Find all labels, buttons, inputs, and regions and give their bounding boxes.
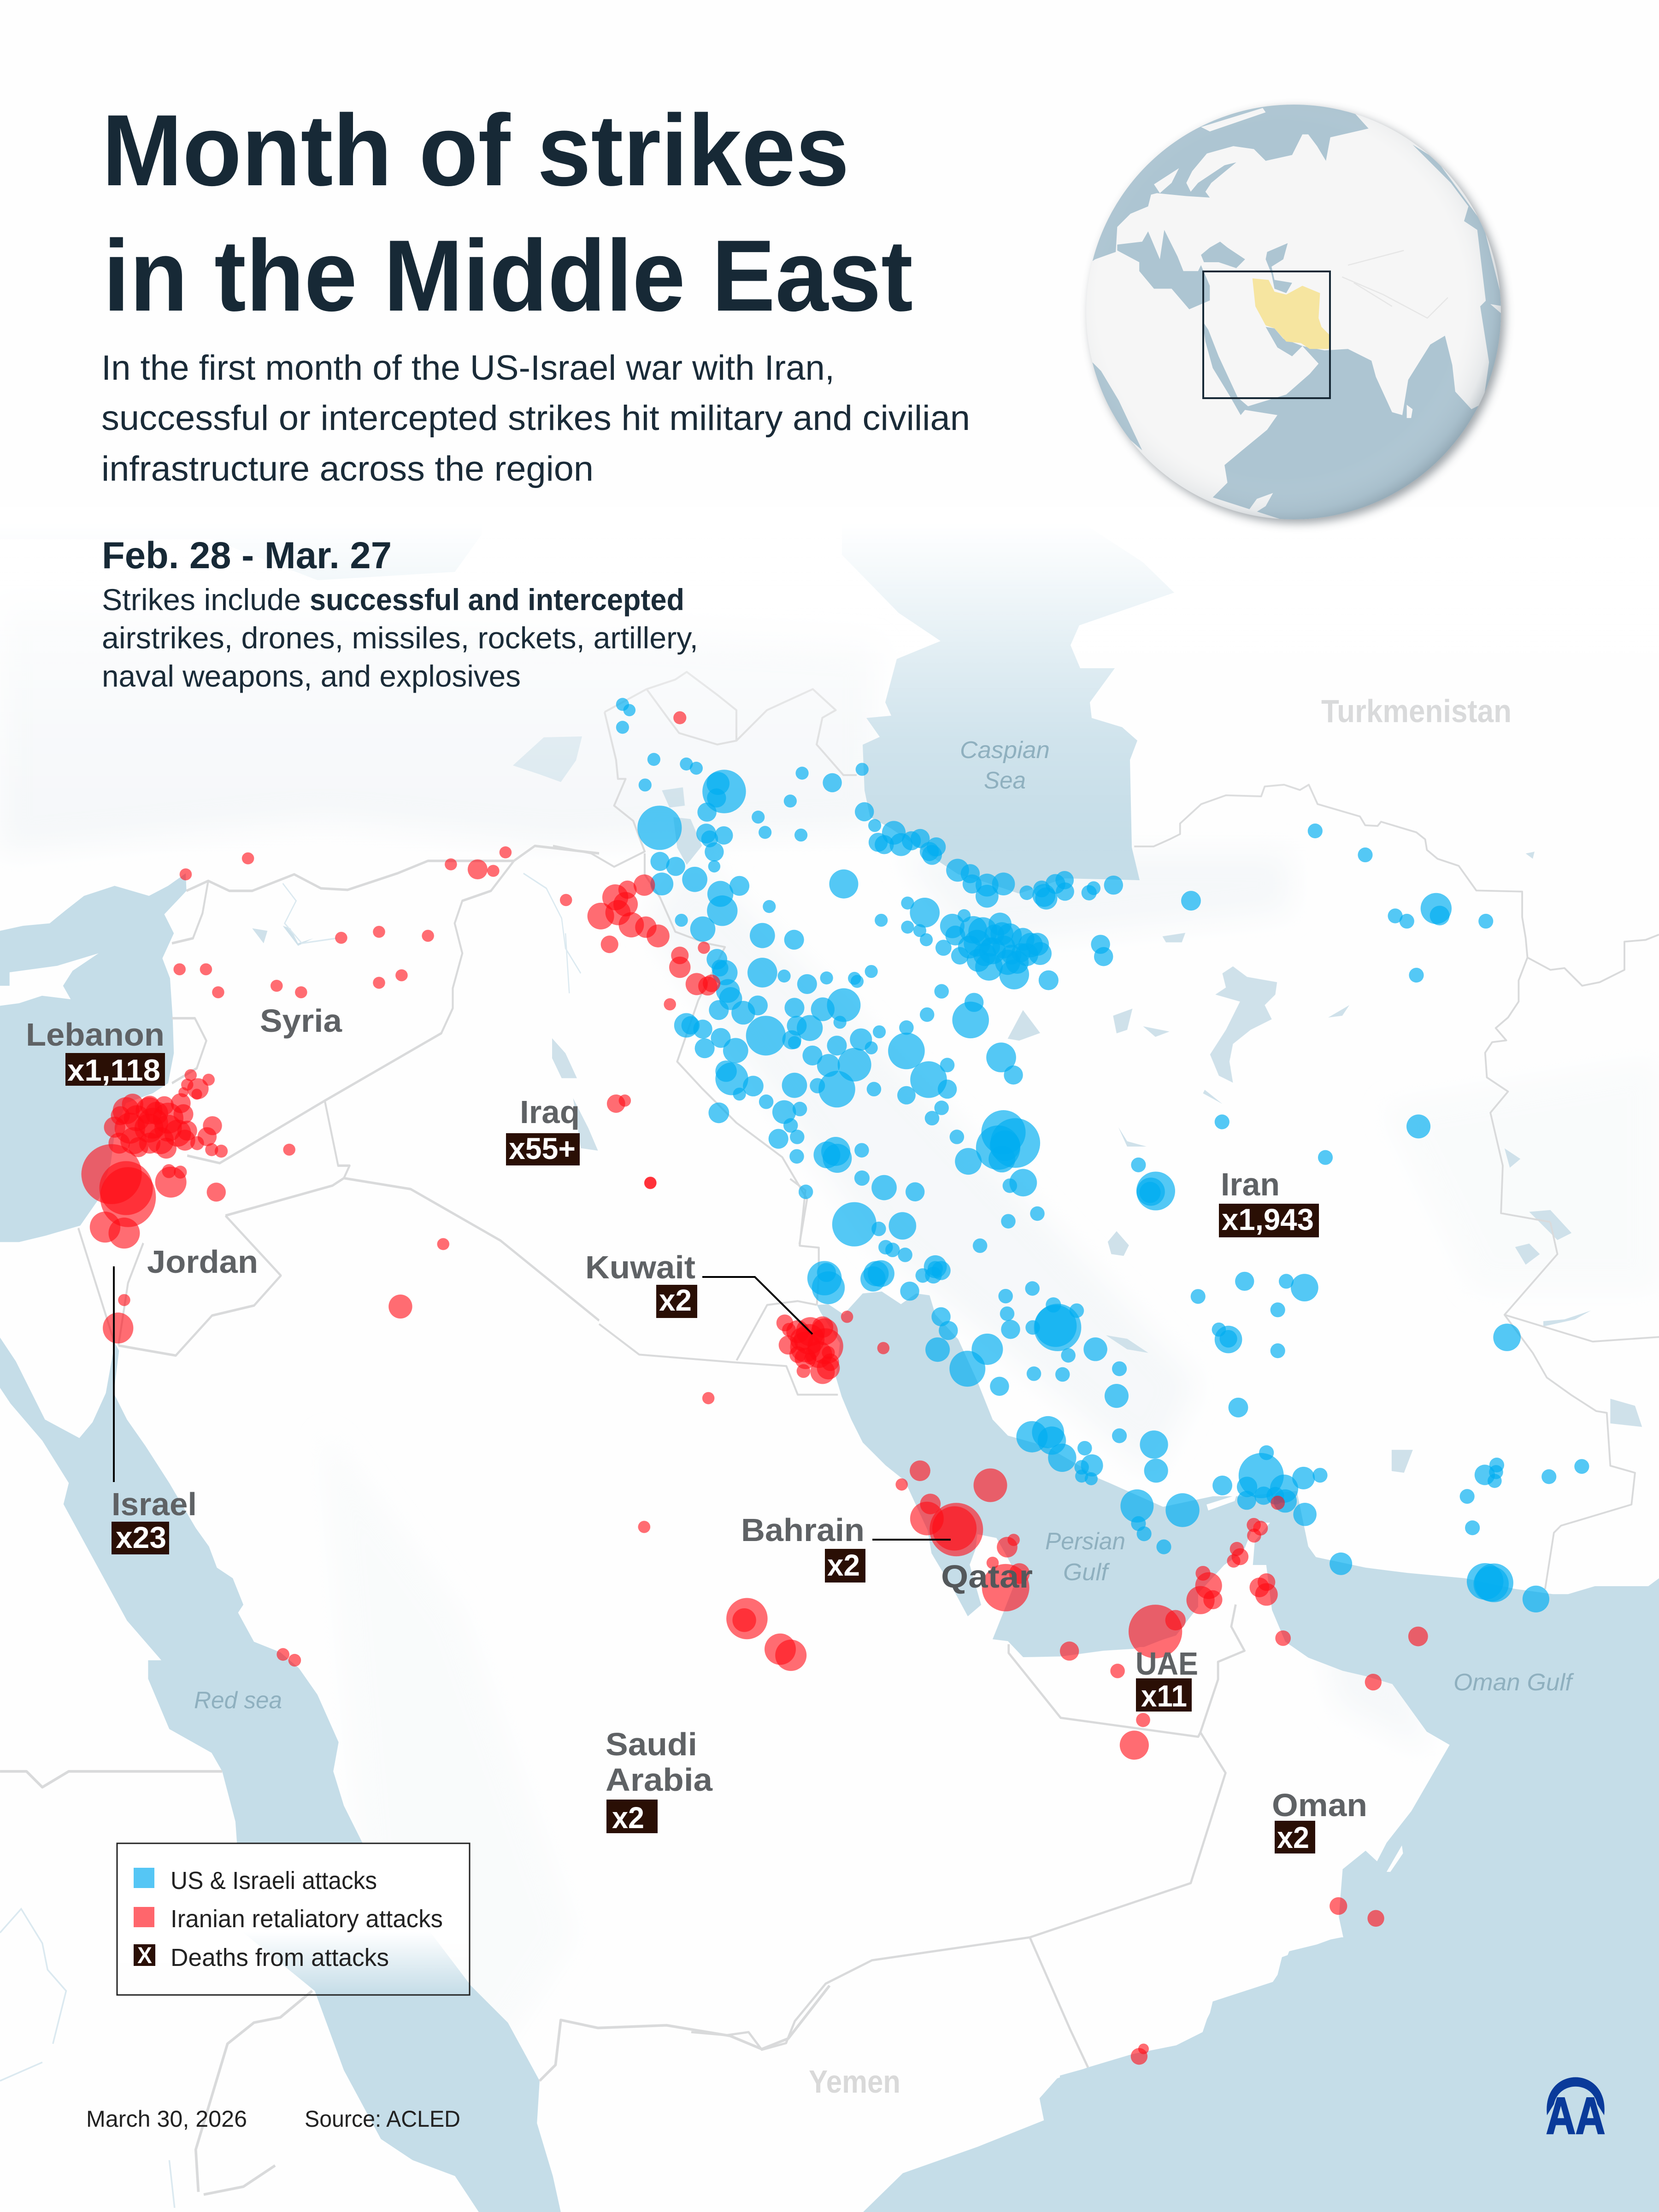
strike markers: Iranian retaliatory attacks <box>82 711 1428 2065</box>
strikes definition text: airstrikes, drones, missiles, rockets, artillery, <box>102 621 698 655</box>
strikes definition text <box>102 582 698 693</box>
subtitle: successful or intercepted strikes hit military and civilian <box>101 399 970 438</box>
strikes definition text: naval weapons, and explosives <box>102 659 521 693</box>
islands <box>0 953 1403 1872</box>
water labels: Gulf <box>1063 1559 1110 1586</box>
strike markers: US and Israeli attacks <box>616 698 1589 1612</box>
label: UAE <box>1135 1646 1198 1713</box>
label: Kuwait with leader line <box>585 1249 812 1334</box>
label: Israel with leader line: Israel <box>112 1486 197 1522</box>
label: Oman <box>1272 1787 1367 1854</box>
label: Lebanon: Lebanon <box>26 1017 165 1053</box>
Red Sea <box>0 1337 561 2212</box>
legend <box>117 1843 470 1995</box>
strikes definition text: Strikes include <box>102 582 301 617</box>
label: Israel with leader line <box>112 1266 197 1554</box>
strikes definition text: successful and intercepted <box>310 582 684 617</box>
label: Israel with leader line: x23 <box>116 1520 166 1554</box>
label: UAE: UAE <box>1135 1646 1198 1682</box>
Persian Gulf <box>817 1292 1198 1657</box>
legend: US & Israeli attacks <box>171 1867 377 1894</box>
label: Iraq: Iraq <box>520 1094 580 1130</box>
label: Saudi Arabia: x2 <box>612 1800 644 1835</box>
label: Qatar: Qatar <box>941 1559 1033 1594</box>
subtitle <box>101 348 970 488</box>
title: Month of strikes <box>102 94 849 207</box>
label: Iran: x1,943 <box>1222 1202 1314 1236</box>
icon: AA logo <box>1546 2077 1605 2145</box>
water labels <box>194 737 1574 1714</box>
footer date: March 30, 2026 <box>86 2106 247 2132</box>
context country labels: Jordan <box>147 1244 258 1280</box>
label: Saudi Arabia <box>606 1726 713 1835</box>
Mediterranean Sea <box>0 873 187 1242</box>
top white fade over map <box>0 507 1659 853</box>
label: Saudi Arabia: Arabia <box>606 1762 713 1798</box>
context country labels: Yemen <box>809 2064 900 2100</box>
Black Sea <box>0 514 482 580</box>
footer source: Source: ACLED <box>305 2106 460 2132</box>
map water bodies <box>0 514 1659 2212</box>
label: Bahrain with leader line <box>741 1512 951 1583</box>
label: Kuwait with leader line: Kuwait <box>585 1249 695 1285</box>
legend swatch: US and Israeli attacks <box>134 1868 154 1888</box>
water labels: Oman Gulf <box>1453 1669 1574 1696</box>
label: Iran <box>1219 1166 1319 1237</box>
label: UAE: x11 <box>1141 1679 1187 1713</box>
legend swatch: Iranian retaliatory attacks <box>134 1907 154 1927</box>
water labels: Sea <box>984 767 1026 794</box>
label: Oman: x2 <box>1277 1820 1309 1854</box>
label: Lebanon <box>26 1017 165 1087</box>
title: in the Middle East <box>103 219 913 332</box>
date range heading: Feb. 28 - Mar. 27 <box>102 535 392 577</box>
label: Oman: Oman <box>1272 1787 1367 1823</box>
subtitle: infrastructure across the region <box>101 449 594 488</box>
label: Bahrain with leader line: Bahrain <box>741 1512 865 1548</box>
globe locator frame <box>1203 271 1330 398</box>
label: Lebanon: x1,118 <box>67 1053 160 1087</box>
rivers <box>0 873 581 2208</box>
label: Iraq <box>506 1094 580 1165</box>
legend: Iranian retaliatory attacks <box>171 1905 443 1933</box>
country borders <box>0 672 1659 2194</box>
label: Iraq: x55+ <box>509 1131 576 1165</box>
water labels: Persian <box>1045 1528 1125 1555</box>
label: Saudi Arabia: Saudi <box>606 1726 697 1762</box>
label: Kuwait with leader line: x2 <box>659 1283 692 1317</box>
subtitle: In the first month of the US-Israel war with Iran, <box>101 348 835 388</box>
legend: Deaths from attacks <box>171 1944 389 1971</box>
title <box>102 94 913 332</box>
Caspian Sea <box>842 521 1174 894</box>
legend swatch: deaths: X <box>137 1942 152 1968</box>
label: Bahrain with leader line: x2 <box>827 1548 860 1582</box>
water labels: Red sea <box>194 1687 282 1714</box>
Gulf of Oman and Arabian Sea <box>1060 1462 1659 2212</box>
locator globe <box>1077 98 1506 524</box>
inland lakes <box>252 736 1642 1473</box>
context country labels: Turkmenistan <box>1321 693 1512 729</box>
context country labels <box>147 693 1512 2100</box>
water labels: Caspian <box>960 737 1050 764</box>
context country labels: Syria <box>260 1003 342 1039</box>
map terrain shading <box>0 599 1659 2074</box>
label: Iran: Iran <box>1221 1166 1280 1202</box>
icon: AA logo: AA <box>1546 2087 1605 2145</box>
